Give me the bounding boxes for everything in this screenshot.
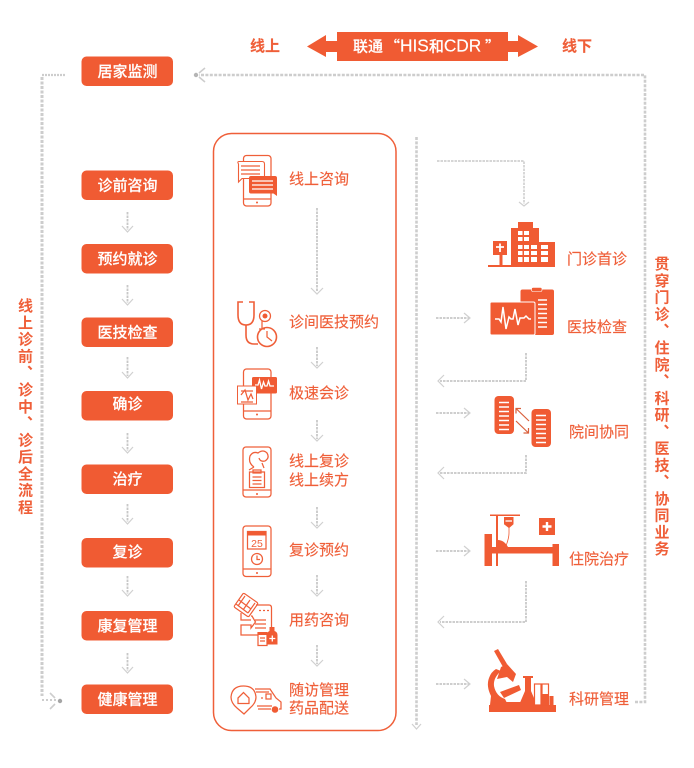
label: follow-up management and drug delivery: [289, 682, 349, 717]
icon: phone with calendar and clock: [243, 526, 271, 576]
button: follow-up visit: [82, 538, 173, 568]
icon: hospital bed with IV drip: [484, 514, 559, 566]
label: online revisit and prescription renewal: 线上复诊: [289, 452, 349, 470]
label: in-clinic examination booking: 诊间医技预约: [289, 314, 379, 331]
label: rapid consultation: 极速会诊: [289, 385, 349, 402]
icon: phone with calendar and clock: 25: [251, 538, 263, 550]
icon: microscope with lab glassware: [488, 649, 556, 712]
vertical caption: online whole process: 线上诊前、诊中、诊后全流程: [16, 297, 33, 516]
loop connector: outer dashed path: [42, 68, 645, 709]
icon: phone with doctor and clipboard: [243, 447, 271, 497]
button: diagnosis: 确诊: [112, 396, 143, 413]
button: home monitoring: [82, 56, 173, 86]
label: follow-up booking: 复诊预约: [289, 541, 349, 559]
button: appointment: 预约就诊: [97, 251, 158, 268]
label: research management: 科研管理: [569, 691, 629, 708]
icon: stethoscope with clock: [238, 302, 276, 346]
icon: phone with chat bubbles: [238, 156, 277, 206]
label: inpatient treatment: 住院治疗: [569, 550, 629, 568]
button: treatment: [82, 464, 173, 494]
header: online label: 线上: [250, 37, 280, 55]
header: two-way arrow banner: [307, 32, 538, 61]
icon: medication document with bottle: [234, 593, 278, 646]
header: two-way arrow banner: ”: [485, 36, 500, 56]
arrows between step buttons: [122, 212, 133, 673]
vertical caption: offline coverage: 贯穿门诊、住院、科研、医技、协同业务: [652, 256, 670, 558]
button: treatment: 治疗: [112, 471, 143, 488]
button: pre-visit consultation: [82, 170, 173, 200]
label: online revisit and prescription renewal: [289, 452, 349, 489]
icon: monitor and clipboard: [490, 288, 554, 335]
icon: location pin and delivery van: [231, 686, 281, 714]
central vertical divider with arrow: [412, 137, 421, 729]
header: two-way arrow banner: HIS: [400, 36, 429, 56]
icon: two documents exchanging: [494, 396, 551, 447]
label: inter-hospital collaboration: 院间协同: [569, 423, 629, 441]
step buttons column: [82, 56, 173, 714]
button: rehabilitation: [82, 611, 173, 640]
button: pre-visit consultation: 诊前咨询: [97, 178, 158, 194]
button: diagnosis: [82, 391, 173, 420]
offline flow connectors: [436, 161, 529, 689]
button: follow-up visit: 复诊: [112, 544, 143, 561]
button: rehabilitation: 康复管理: [97, 617, 158, 635]
icon: phone with ECG and report: [238, 369, 277, 419]
header: two-way arrow banner: 联通: [353, 38, 383, 56]
label: medication consultation: 用药咨询: [289, 612, 349, 629]
header: two-way arrow banner: “: [385, 36, 400, 56]
button: health management: [82, 684, 173, 714]
arrows inside online panel: [311, 208, 323, 666]
label: follow-up management and drug delivery: 药品配送: [289, 700, 349, 717]
label: follow-up management and drug delivery: 随访管理: [289, 682, 349, 699]
button: appointment: [82, 244, 173, 274]
header: offline label: 线下: [562, 37, 592, 55]
label: online revisit and prescription renewal: 线上续方: [289, 472, 349, 489]
button: home monitoring: 居家监测: [97, 64, 158, 80]
label: online consultation: 线上咨询: [289, 171, 349, 188]
panel: online services: [214, 134, 396, 730]
label: medical examination: 医技检查: [567, 319, 627, 336]
icon: hospital building: [488, 222, 555, 267]
button: medical examination: 医技检查: [97, 324, 158, 342]
header: two-way arrow banner: 和CDR: [429, 36, 481, 56]
button: health management: 健康管理: [97, 690, 158, 708]
button: medical examination: [82, 318, 173, 347]
label: outpatient first visit: 门诊首诊: [567, 251, 627, 268]
